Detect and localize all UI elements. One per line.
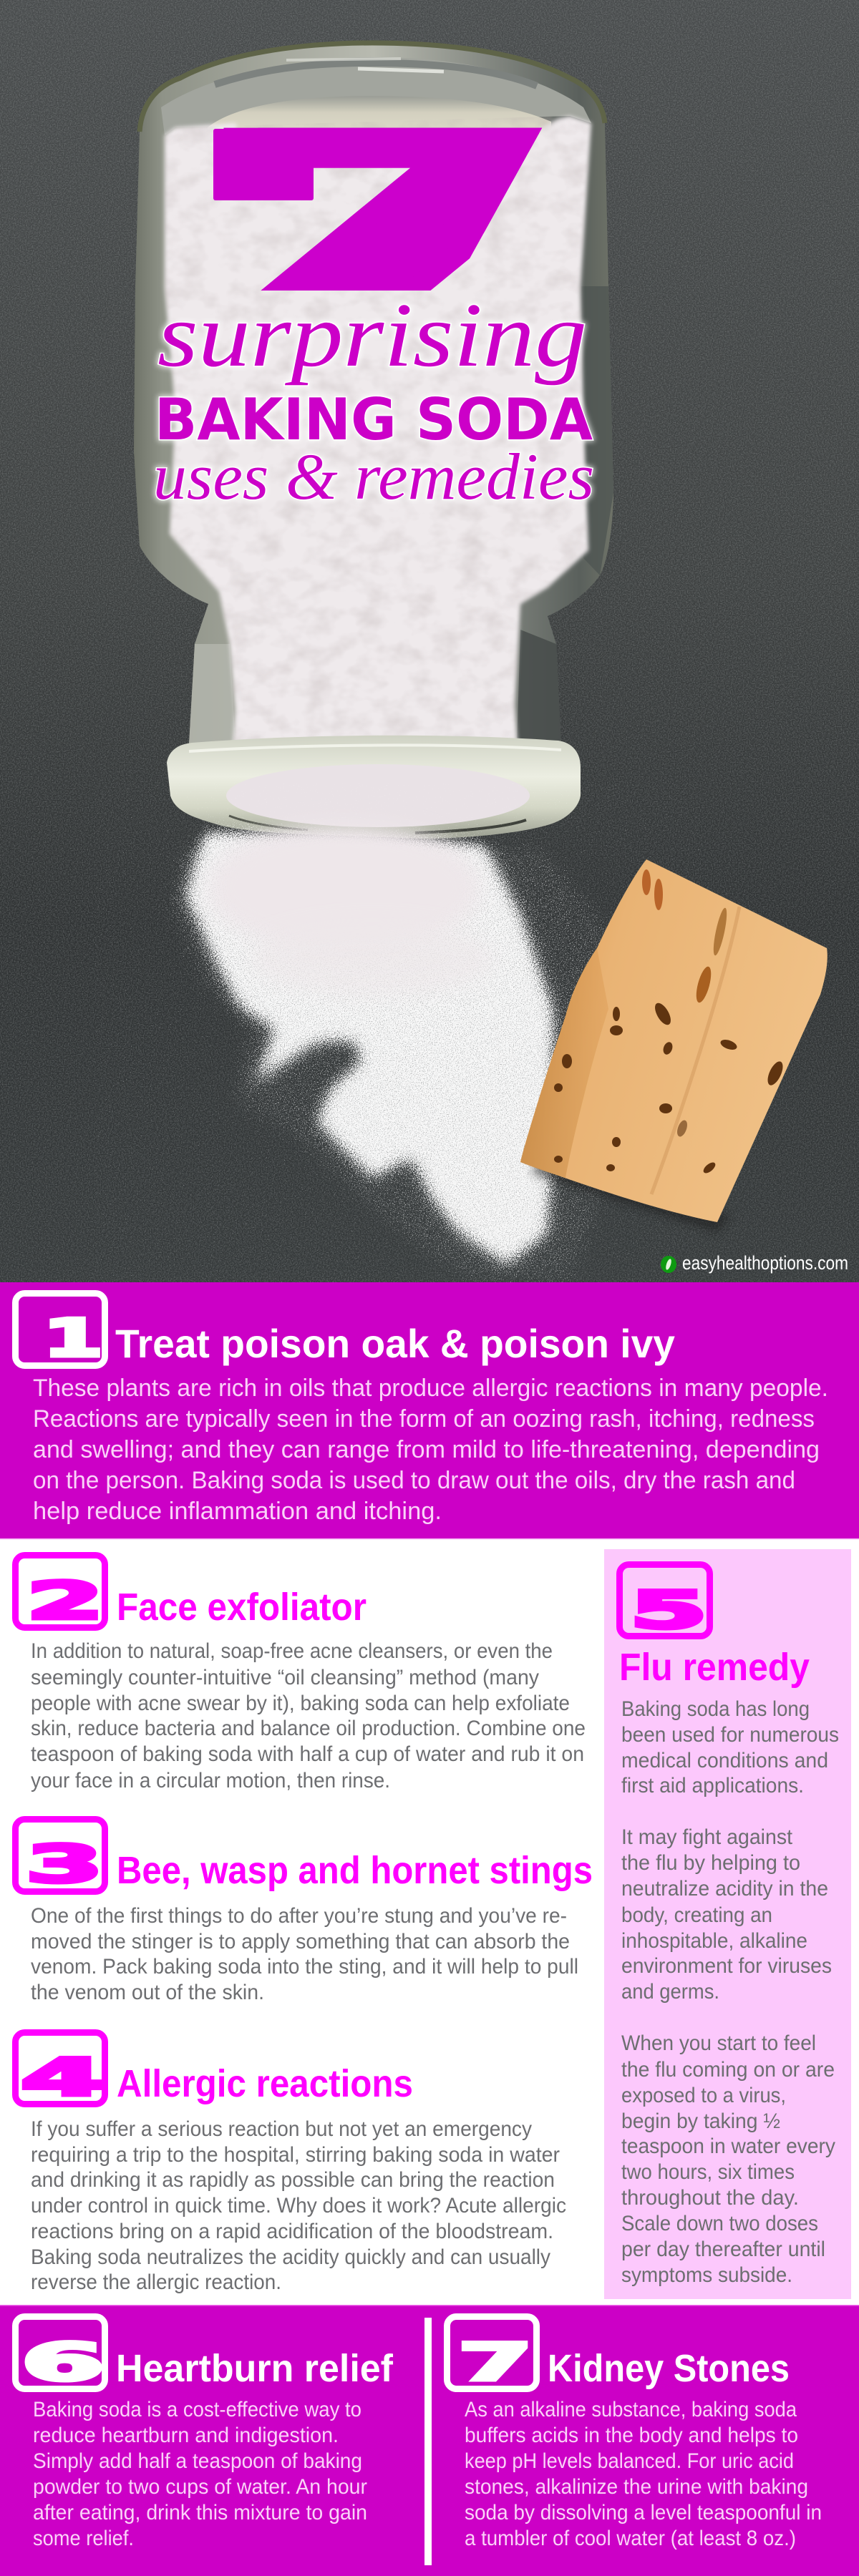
cork pits: [554, 869, 786, 1175]
main title: [151, 127, 598, 504]
body text: first aid applications.: [621, 1774, 804, 1797]
body text: Reactions are typically seen in the form of an oozing rash, itching, redness: [33, 1405, 815, 1433]
body text: soda by dissolving a level teaspoonful in: [465, 2501, 822, 2524]
body text: stones, alkalinize the urine with baking: [465, 2475, 808, 2499]
body text: people with acne swear by it), baking soda can help exfoliate: [31, 1692, 570, 1715]
body text: [33, 2398, 367, 2550]
remedy 7 kidney stones: [447, 2317, 822, 2550]
icon: number 5 badge: [620, 1564, 710, 1640]
panel: remedy 2 face exfoliator: [16, 1556, 586, 1792]
body text: neutralize acidity in the: [621, 1877, 828, 1901]
heading: Heartburn relief: [116, 2347, 394, 2390]
body text: reduce heartburn and indigestion.: [33, 2424, 339, 2447]
body text: These plants are rich in oils that produce allergic reactions in many people.: [33, 1375, 828, 1402]
body text: moved the stinger is to apply something that can absorb the: [31, 1930, 570, 1953]
body text: a tumbler of cool water (at least 8 oz.): [465, 2527, 796, 2550]
body text: buffers acids in the body and helps to: [465, 2424, 798, 2447]
body text: body, creating an: [621, 1903, 772, 1927]
body text: teaspoon in water every: [621, 2135, 835, 2158]
body text: [621, 1697, 839, 2287]
body text: Baking soda neutralizes the acidity quickly and can usually: [31, 2245, 550, 2269]
icon: number 2 badge: [16, 1556, 105, 1631]
title line: uses and remedies: uses & remedies: [153, 440, 594, 513]
panel: remedy 1 poison oak and poison ivy: [0, 1282, 859, 1540]
body text: As an alkaline substance, baking soda: [465, 2398, 797, 2421]
body text: and drinking it as rapidly as possible can bring the reaction: [31, 2168, 555, 2192]
body text: two hours, six times: [621, 2160, 795, 2184]
body text: the venom out of the skin.: [31, 1981, 264, 2004]
heading: Allergic reactions: [117, 2062, 413, 2105]
jar lip: [167, 736, 581, 839]
body text: some relief.: [33, 2527, 134, 2550]
hero photo: spilled baking soda jar: [0, 0, 859, 1282]
body text: requiring a trip to the hospital, stirring baking soda in water: [31, 2143, 560, 2167]
body text: the flu by helping to: [621, 1851, 800, 1875]
body text: on the person. Baking soda is used to draw out the oils, dry the rash and: [33, 1467, 795, 1494]
panel: remedy 4 allergic reactions: [16, 2032, 566, 2294]
cork stopper: [520, 859, 828, 1232]
remedy 6 heartburn relief: [16, 2317, 394, 2550]
baking soda inside the jar: [162, 114, 594, 740]
body text: help reduce inflammation and itching.: [33, 1498, 442, 1525]
big numeral 7: [213, 127, 543, 291]
title line: baking soda: BAKING SODA: [155, 386, 593, 453]
body text: exposed to a virus,: [621, 2084, 786, 2107]
body text: and swelling; and they can range from mild to life-threatening, depending: [33, 1436, 820, 1463]
body text: after eating, drink this mixture to gain: [33, 2501, 367, 2524]
body text: Baking soda is a cost-effective way to: [33, 2398, 361, 2421]
panel: remedy 3 stings: [16, 1819, 593, 2004]
body text: [31, 1904, 578, 2004]
big numeral 7: 7: [236, 93, 623, 334]
body text: One of the first things to do after you’re stung and you’ve re-: [31, 1904, 567, 1928]
icon: number 4 badge: 4: [21, 2047, 105, 2107]
heading: Bee, wasp and hornet stings: [117, 1849, 593, 1892]
body text: keep pH levels balanced. For uric acid: [465, 2449, 794, 2473]
spilled baking soda pile: [165, 823, 630, 1282]
body text: under control in quick time. Why does it work? Acute allergic: [31, 2194, 566, 2218]
body text: Baking soda has long: [621, 1697, 810, 1721]
body text: Scale down two doses: [621, 2212, 818, 2235]
website credit: [661, 1252, 848, 1274]
big numeral 7: 7: [202, 93, 588, 334]
body text: [31, 1639, 586, 1792]
body text: per day thereafter until: [621, 2238, 825, 2261]
heading: Flu remedy: [619, 1646, 810, 1689]
panel: remedies 6 and 7: [0, 2305, 859, 2576]
icon: number 1 badge: 1: [43, 1308, 103, 1368]
icon: number 7 badge: [447, 2317, 537, 2392]
icon: number 3 badge: 3: [26, 1834, 103, 1894]
title line: surprising: surprising: [157, 284, 587, 386]
body text: It may fight against: [621, 1825, 793, 1849]
body text: the flu coming on or are: [621, 2058, 835, 2082]
body text: reactions bring on a rapid acidification of the bloodstream.: [31, 2220, 553, 2243]
body text: throughout the day.: [621, 2186, 799, 2210]
body text: powder to two cups of water. An hour: [33, 2475, 367, 2499]
body text: venom. Pack baking soda into the sting, and it will help to pull: [31, 1955, 578, 1979]
body text: inhospitable, alkaline: [621, 1929, 807, 1953]
body text: medical conditions and: [621, 1749, 828, 1772]
glass jar body: [134, 43, 613, 744]
body text: [33, 1375, 828, 1525]
body text: environment for viruses: [621, 1954, 832, 1978]
icon: number 7 badge: 7: [458, 2332, 533, 2392]
body text: reverse the allergic reaction.: [31, 2270, 281, 2294]
heading: Treat poison oak & poison ivy: [115, 1321, 675, 1366]
panel: remedy 5 flu remedy: [604, 1549, 851, 2299]
body text: symptoms subside.: [621, 2263, 792, 2287]
body text: In addition to natural, soap-free acne cleansers, or even the: [31, 1639, 553, 1663]
body text: If you suffer a serious reaction but not yet an emergency: [31, 2117, 532, 2141]
body text: [31, 2117, 566, 2294]
heading: Kidney Stones: [548, 2347, 790, 2390]
body text: and germs.: [621, 1980, 719, 2004]
body text: begin by taking ½: [621, 2109, 780, 2133]
icon: number 1 badge: [16, 1294, 105, 1368]
icon: number 6 badge: [16, 2317, 105, 2392]
body text: your face in a circular motion, then rinse.: [31, 1769, 390, 1792]
icon: number 2 badge: 2: [26, 1571, 104, 1631]
heading: Face exfoliator: [117, 1586, 367, 1629]
icon: number 5 badge: 5: [630, 1580, 707, 1640]
body text: seemingly counter-intuitive “oil cleansing” method (many: [31, 1666, 539, 1689]
icon: number 4 badge: [16, 2032, 105, 2107]
icon: number 3 badge: [16, 1819, 105, 1894]
body text: skin, reduce bacteria and balance oil production. Combine one: [31, 1717, 586, 1740]
icon: green leaf badge: [661, 1256, 676, 1273]
body text: When you start to feel: [621, 2031, 816, 2055]
body text: teaspoon of baking soda with half a cup of water and rub it on: [31, 1742, 584, 1766]
body text: been used for numerous: [621, 1723, 839, 1747]
icon: number 6 badge: 6: [21, 2332, 105, 2392]
body text: [465, 2398, 822, 2550]
dark slate background: [0, 0, 859, 1282]
body text: Simply add half a teaspoon of baking: [33, 2449, 362, 2473]
